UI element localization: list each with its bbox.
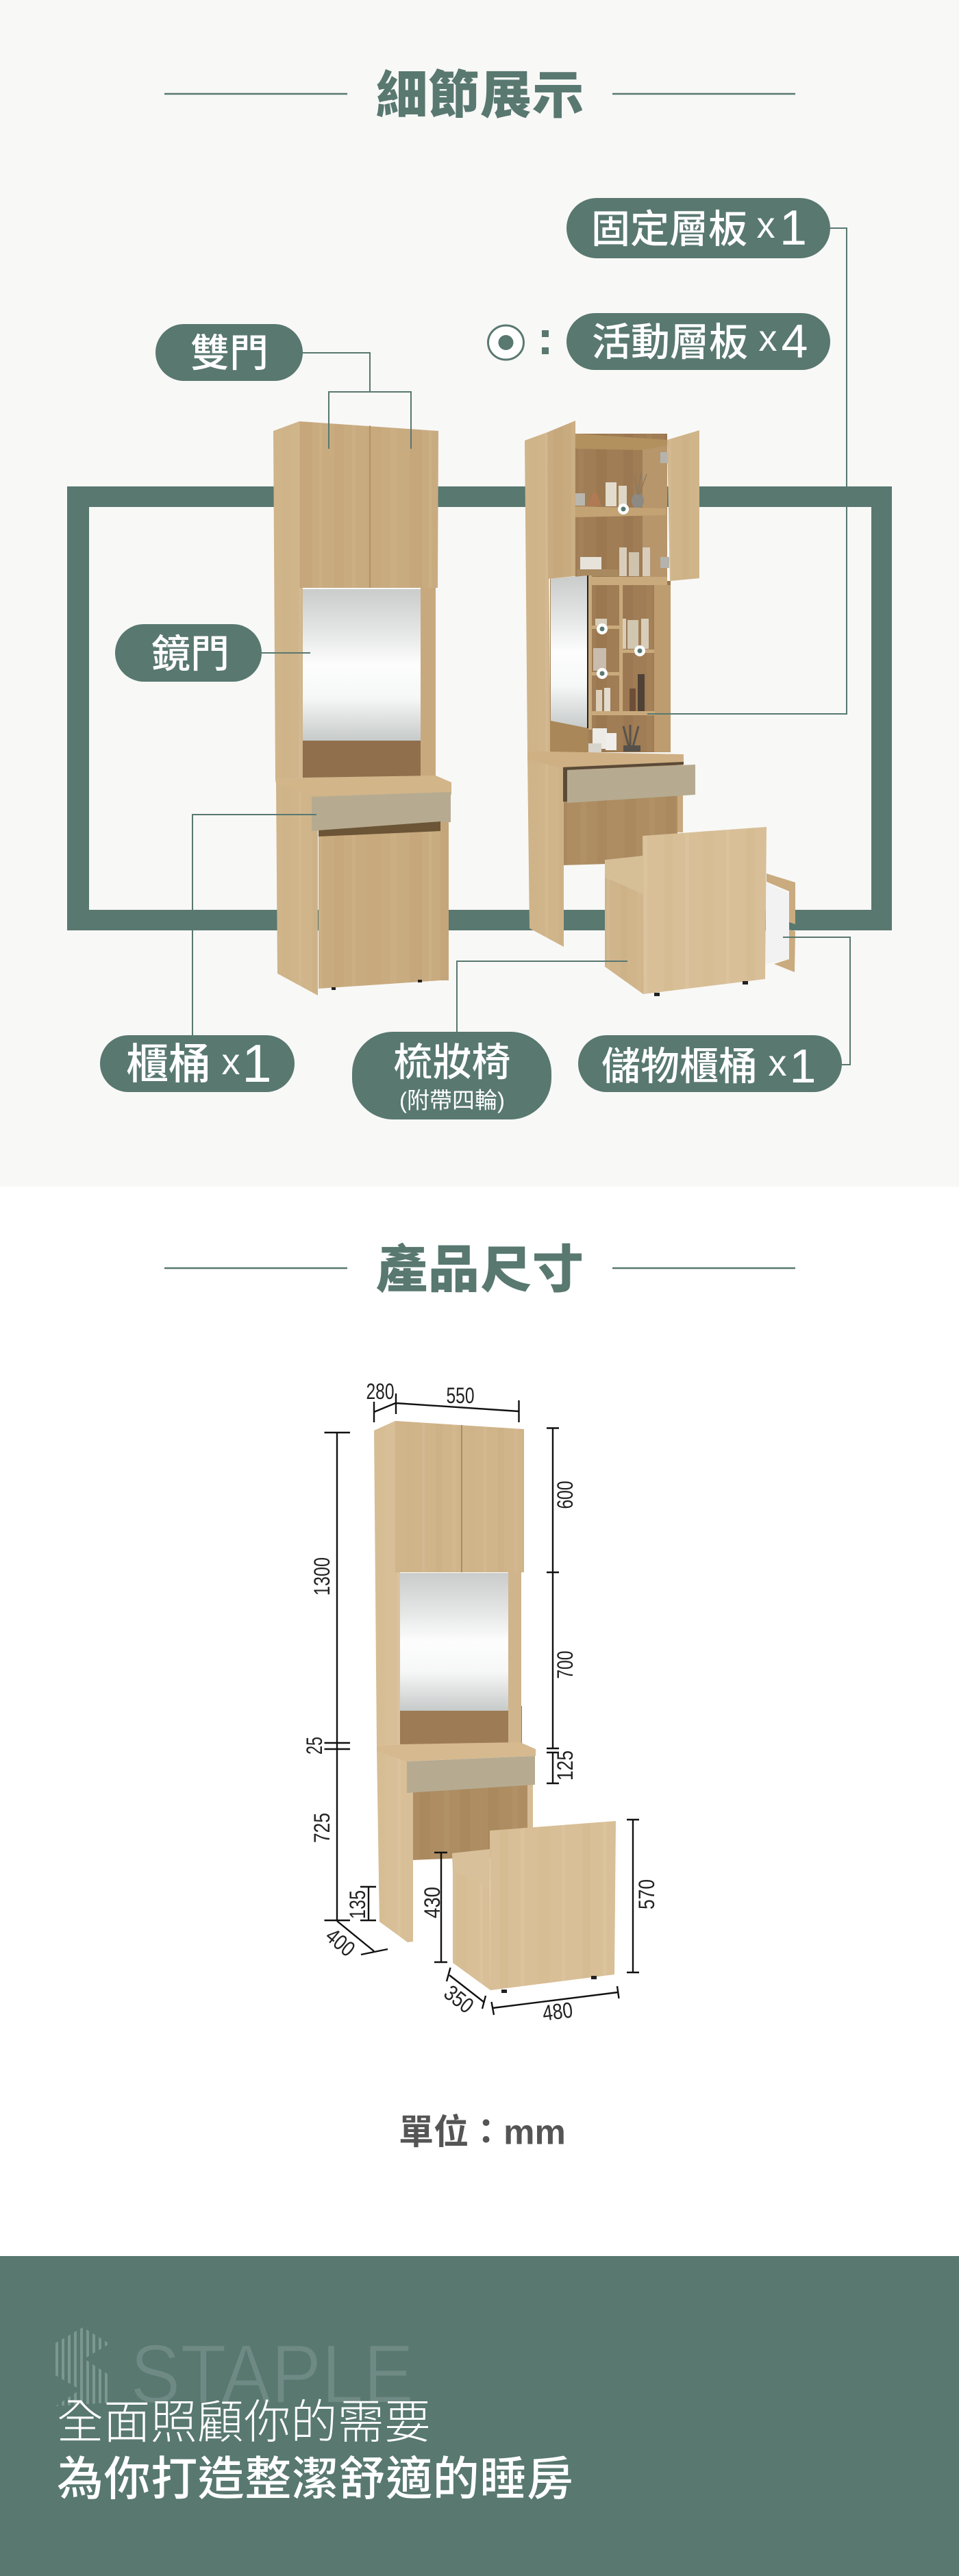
lower shelves [592,626,619,629]
pill: mirror door: 鏡門 [151,632,229,676]
dimension labels: 430 [420,1887,445,1918]
stool drawer wood side [767,874,795,924]
pill: dressing stool [352,1032,551,1119]
stool front [319,831,440,989]
left side panel upper [273,421,304,780]
mirror door support [550,575,588,752]
pill: movable shelf x4 [566,313,830,370]
upper doors [299,421,438,588]
dimension labels: 600 [553,1481,577,1509]
pill: double doors [155,324,303,381]
pill: fixed shelf x1: 固定層板 [591,208,747,251]
heading: product dimensions: 產品尺寸 [376,1241,584,1298]
stool side [605,877,643,994]
right leg [440,822,449,980]
connector: storage drawer [783,937,850,1065]
dimension labels: 400 [321,1923,360,1961]
drawer front [312,792,451,831]
legend: movable shelf marker [488,325,549,360]
hinges [660,452,669,463]
pill: drawer x1 [100,1033,295,1093]
pill: fixed shelf x1: 1 [780,201,807,256]
dimension labels: 725 [310,1813,334,1843]
dimension labels: 700 [553,1651,577,1679]
pill: drawer x1: 1 [242,1033,272,1093]
logo mark [55,2327,110,2406]
pill: drawer x1: x [222,1041,240,1082]
dimension labels: 135 [345,1890,370,1919]
counter items [587,725,640,753]
stool back panel [643,827,767,994]
dimension labels: 125 [553,1750,577,1781]
furniture: closed dressing cabinet [273,421,451,995]
dimension labels: 1300 [310,1557,334,1596]
upper fixed shelf [575,506,666,517]
stool seat [605,856,643,894]
mirror [303,589,421,741]
feet [332,987,336,990]
pill: fixed shelf x1 [566,198,830,258]
decorative green frame [67,486,892,930]
pill: storage drawer x1 [578,1035,842,1093]
pill: dressing stool: (附帶四輪) [399,1088,505,1113]
pill: storage drawer x1: 1 [790,1039,816,1093]
pill: movable shelf x4: 活動層板 [592,321,748,364]
gap above drawer [563,762,684,802]
pill: fixed shelf x1: x [756,205,775,246]
dimension labels: 25 [302,1737,327,1755]
stool drawer white box [766,882,789,964]
dimension labels: 280 [366,1379,395,1404]
stool feet [654,993,660,996]
counter top [527,752,684,767]
pill: storage drawer x1: x [769,1043,786,1084]
connector: fixed shelf [647,228,847,714]
connector: drawer [192,815,316,1035]
dimension labels: 350 [440,1980,478,2018]
pill: movable shelf x4: x [759,318,777,359]
logo wordmark: STAPLE [130,2327,414,2420]
furniture: dimension drawing [374,1421,616,1993]
dimension lines [374,1394,519,1422]
unit note: 單位：mm [399,2113,566,2151]
connector: mirror door [262,652,310,654]
open upper-left door [547,421,575,579]
pill: drawer x1: 櫃桶 [126,1041,211,1088]
upper shelf items [575,473,650,576]
lower back below drawer [562,760,677,865]
open mirror door [551,575,588,728]
right door [667,430,699,581]
left panel upper [525,432,551,754]
left side panel lower [276,781,318,995]
markers: movable shelves [597,504,645,679]
dimension labels [302,1379,659,2026]
heading: detail showcase: 細節展示 [376,66,584,124]
pill: movable shelf x4: 4 [782,314,808,368]
back recess under mirror [303,739,422,778]
lower shelf items [593,619,649,711]
right inner panel [421,588,436,778]
lower interior [588,581,671,752]
connector: stool [457,961,627,1032]
left panel lower [527,758,564,947]
counter top [275,776,451,797]
dimension labels: 550 [447,1383,474,1408]
furniture: opened dressing cabinet [525,421,795,996]
pill: storage drawer x1: 儲物櫃桶 [601,1045,758,1089]
pill: dressing stool: 梳妝椅 [393,1041,511,1085]
shadow gap [319,821,440,837]
dimension labels: 570 [634,1879,659,1909]
pill: mirror door [115,624,262,682]
footer text line 1: 全面照顧你的需要 [57,2397,431,2449]
upper interior [575,434,667,581]
panel: detail showcase background [0,0,959,1187]
connector: double doors [303,353,411,449]
drawer front [567,765,695,803]
panel: footer [0,2256,959,2576]
pill: double doors: 雙門 [190,332,269,375]
dimension labels: 480 [541,1997,574,2026]
footer text line 2: 為你打造整潔舒適的睡房 [57,2453,573,2505]
